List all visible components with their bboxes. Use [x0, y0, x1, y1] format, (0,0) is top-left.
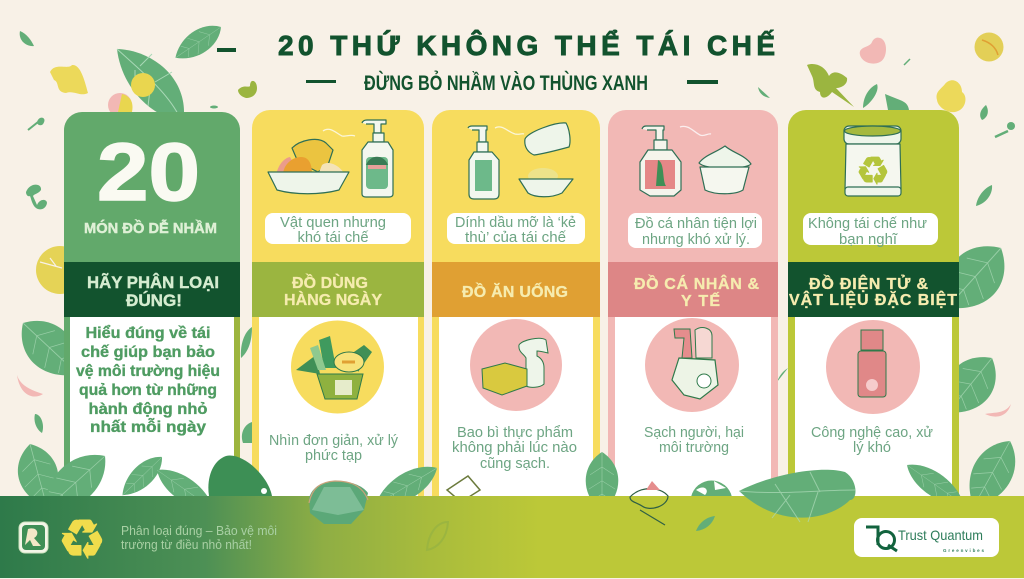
decorative leaves side margins [8, 231, 1020, 443]
icon: small bowl [519, 168, 573, 197]
icon: soap pump [640, 126, 681, 196]
app icon [19, 522, 48, 553]
label: electronics caption: bạn nghĩ [839, 232, 898, 248]
white content area: Công nghệ cao, xử [811, 425, 933, 441]
leaves above the footer [11, 431, 1024, 526]
panel: electronics and special materials [788, 110, 959, 496]
footer slogan: Phân loại đúng – Bảo vệ môi [121, 523, 277, 538]
logo: Trust Quantum: Greenvibes [943, 548, 984, 553]
white content area: nhất mỗi ngày [90, 419, 206, 436]
icon: lidded pot [699, 146, 751, 194]
label: household caption [265, 213, 411, 246]
label: food caption [447, 213, 585, 246]
band: food heading: ĐỒ ĂN UỐNG [462, 281, 568, 301]
footer band [0, 496, 1024, 578]
icon: pump bottle [468, 126, 499, 199]
panel: intro [64, 112, 240, 496]
logo: Trust Quantum: Trust Quantum [898, 527, 983, 543]
icon: bowl of food [268, 139, 349, 194]
icon: face mask [309, 481, 368, 524]
white content area [70, 317, 240, 496]
footer slogan [121, 523, 277, 552]
white content area: môi trường [659, 440, 729, 456]
decorative leaves top left [20, 17, 257, 294]
icon: bottle [362, 120, 393, 197]
label: personal caption: nhưng khó xử lý. [642, 232, 750, 248]
white content area [615, 317, 771, 496]
panel: personal and medical [608, 110, 778, 496]
label: household caption: Vật quen nhưng [280, 215, 386, 231]
label: electronics caption [803, 213, 938, 248]
white content area: chế giúp bạn bảo [81, 344, 215, 361]
band: electronics heading: ĐỒ ĐIỆN TỬ & [809, 274, 928, 293]
label: personal caption: Đồ cá nhân tiện lợi [635, 216, 757, 232]
white content area [795, 317, 952, 496]
band: household heading: HÀNG NGÀY [284, 290, 382, 309]
band: personal heading: ĐỒ CÁ NHÂN & [634, 274, 759, 293]
large leaf on footer [739, 470, 855, 522]
footer slogan: trường từ điều nhỏ nhất! [121, 537, 252, 552]
icon: recycling jar [844, 126, 901, 196]
icon: tied thread [630, 481, 668, 525]
band: call to action [64, 262, 240, 317]
white content area: Hiểu đúng về tái [86, 325, 210, 342]
label: food caption: Dính dầu mỡ là ‘kẻ [455, 215, 576, 231]
caption: MÓN ĐỒ DỄ NHẦM [84, 219, 217, 237]
white content area [439, 317, 593, 496]
title dashes [217, 48, 718, 84]
white content area: hành động nhỏ [88, 401, 208, 418]
decorative leaves top right [758, 32, 1015, 206]
band: personal heading [608, 262, 778, 317]
white content area: quả hơn từ những [79, 382, 217, 399]
label: electronics caption: Không tái chế như [808, 216, 927, 232]
title: 20 THỨ KHÔNG THỂ TÁI CHẾ [278, 29, 775, 61]
panel: food and drink [432, 110, 600, 496]
band: electronics heading: VẬT LIỆU ĐẶC BIỆT [789, 290, 957, 309]
label: household caption: khó tái chế [298, 230, 368, 246]
band: household heading [252, 262, 424, 317]
white content area: vệ môi trường hiệu [76, 363, 220, 380]
band: household heading: ĐỒ DÙNG [292, 273, 368, 292]
band: call to action: ĐÚNG! [126, 291, 182, 310]
panel: household items [252, 110, 424, 496]
icon: faded leaf on footer [427, 522, 448, 550]
icon: recycling jar: ♻ [856, 149, 890, 193]
white content area: Bao bì thực phẩm [457, 425, 573, 441]
white content area: phức tạp [305, 448, 362, 464]
small leaf on footer [696, 516, 715, 531]
band: electronics heading [788, 262, 959, 317]
logo: Trust Quantum [854, 518, 999, 557]
white content area [259, 317, 418, 496]
subtitle: ĐỪNG BỎ NHẦM VÀO THÙNG XANH [364, 71, 648, 95]
band: food heading [432, 262, 600, 317]
band: personal heading: Y TẾ [681, 291, 720, 310]
band: call to action: HÃY PHÂN LOẠI [87, 272, 219, 292]
white content area: cũng sạch. [480, 456, 550, 472]
icon: recycling symbol: ♻ [58, 508, 106, 571]
label: food caption: thù’ của tái chế [465, 230, 566, 246]
white content area: Sạch người, hại [644, 425, 744, 441]
big number 20: 20 [97, 127, 200, 218]
white content area: Nhìn đơn giản, xử lý [269, 433, 399, 449]
white content area: lý khó [853, 440, 891, 456]
white content area: không phải lúc nào [452, 440, 577, 456]
label: personal caption [628, 213, 762, 248]
icon: tipped cup [525, 123, 570, 155]
